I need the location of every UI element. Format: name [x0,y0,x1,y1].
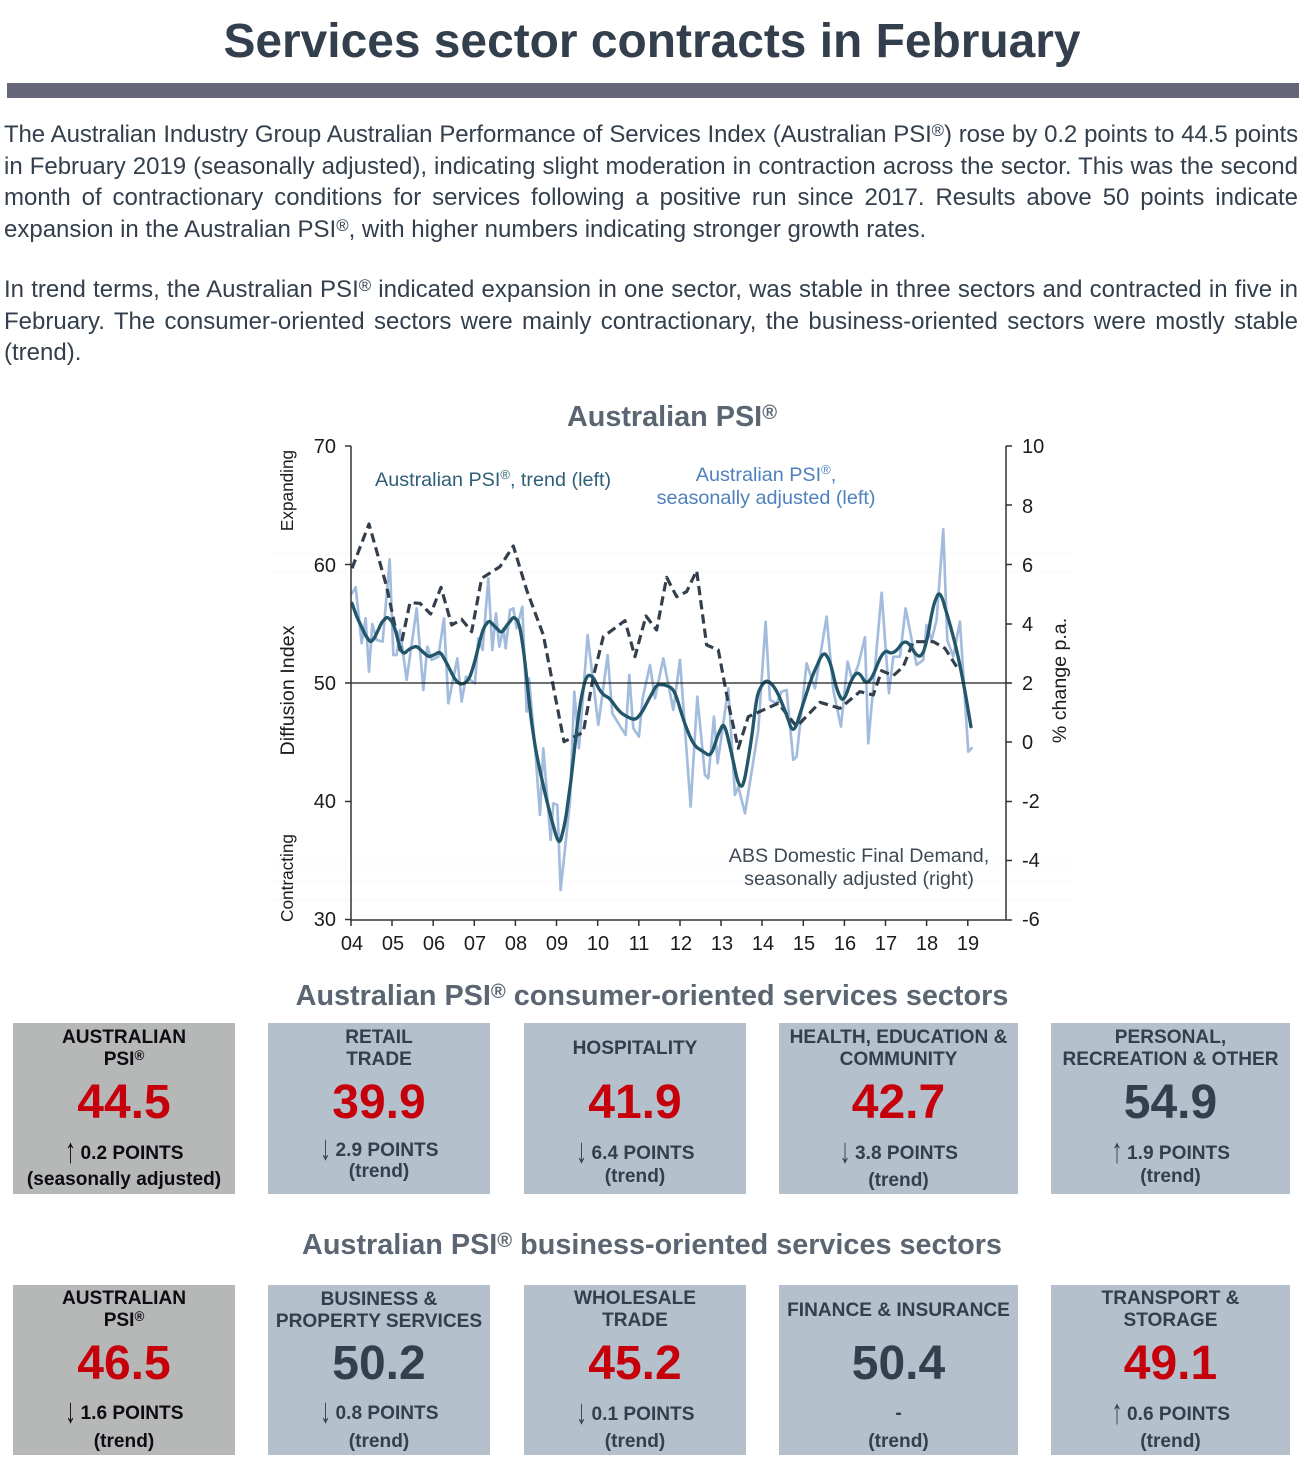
intro paragraph 2: (trend). [4,339,81,366]
card: personal, recreation and other: RECREATION & OTHER [1062,1049,1279,1070]
year labels: 15 [793,933,815,955]
left axis titles: Diffusion Index [277,625,299,755]
intro paragraph 1: expansion in the Australian PSI®, with higher numbers indicating stronger growth rates. [4,216,926,243]
intro paragraph 1: in February 2019 (seasonally adjusted), indicating slight moderation in contraction across the sector. This was the second [4,153,1298,180]
right axis labels [1022,436,1044,931]
series: PSI trend (dark teal) [352,594,971,842]
series label: trend: , trend (left) [510,469,611,491]
card: retail trade: TRADE [346,1049,412,1070]
axes and ticks [345,446,1012,926]
card: Australian PSI consumer: (seasonally adjusted) [27,1169,221,1190]
card: hospitality [524,1023,746,1194]
series label: ABS demand: ABS Domestic Final Demand, [729,845,989,867]
card: health, education and community: 3.8 POINTS [855,1143,958,1164]
card: wholesale trade: (trend) [605,1431,665,1452]
intro paragraph 2 [4,276,1298,366]
card: business and property services: (trend) [349,1431,409,1452]
card: hospitality: ↓ [576,1131,587,1171]
card: Australian PSI consumer: PSI® [104,1048,144,1070]
card: health, education and community: COMMUNITY [840,1049,957,1070]
series label: ABS demand: seasonally adjusted (right) [744,868,974,890]
card: hospitality: 41.9 [588,1076,682,1129]
year labels: 13 [711,933,733,955]
card: Australian PSI business [13,1285,235,1455]
card: finance and insurance: FINANCE & INSURANCE [787,1300,1010,1321]
card: business and property services: 0.8 POINTS [336,1403,438,1424]
card: transport and storage: 0.6 POINTS [1127,1404,1230,1425]
series label: seasonally adjusted: seasonally adjusted (left) [657,487,875,509]
card: hospitality: HOSPITALITY [573,1038,697,1059]
left axis labels: 30 [314,909,336,931]
left axis labels: 60 [314,555,336,577]
card: finance and insurance: - [895,1403,902,1424]
year labels: 11 [629,933,649,955]
card: Australian PSI consumer: 0.2 POINTS [81,1143,183,1164]
year labels: 10 [587,933,609,955]
intro paragraph 1 [4,121,1298,243]
card: personal, recreation and other: ↑ [1112,1131,1123,1171]
year labels: 04 [341,933,363,955]
card: wholesale trade: WHOLESALE [574,1288,696,1309]
title rule bar [7,83,1299,98]
card: Australian PSI business: AUSTRALIAN [62,1288,186,1309]
card: transport and storage: TRANSPORT & [1102,1288,1239,1309]
horizontal line at 50 [351,682,1011,684]
title: Services sector contracts in February [223,15,1081,68]
chart heading: Australian PSI® [567,401,777,433]
card: personal, recreation and other: (trend) [1140,1166,1201,1187]
card: health, education and community [779,1023,1018,1194]
year labels [341,933,979,955]
year labels: 18 [916,933,938,955]
card: business and property services: PROPERTY SERVICES [276,1311,482,1332]
left axis labels: 50 [314,673,336,695]
card: Australian PSI business: ↓ [65,1391,76,1431]
card: personal, recreation and other: PERSONAL, [1115,1027,1226,1048]
card: wholesale trade [524,1285,746,1455]
intro paragraph 2: In trend terms, the Australian PSI® indicated expansion in one sector, was stable in three sectors and contracted in five in [4,276,1298,303]
year labels: 05 [382,933,404,955]
right axis labels: 6 [1022,555,1033,577]
right axis labels: -4 [1022,850,1040,872]
year labels: 09 [546,933,568,955]
series label: seasonally adjusted: , [831,464,836,486]
left axis titles: Expanding [277,450,297,531]
card: Australian PSI consumer: AUSTRALIAN [62,1027,186,1048]
series: ABS Domestic Final Demand (dashed) [352,524,957,748]
left axis labels: 40 [314,791,336,813]
intro paragraph 1: The Australian Industry Group Australian Performance of Services Index (Australian PSI®) rose by 0.2 points to 44.5 points [4,121,1298,148]
line chart: Australian PSI [273,436,1071,955]
card: hospitality: (trend) [605,1166,665,1187]
series label: trend: ® [500,467,510,482]
series: seasonally adjusted PSI (light blue) [352,529,972,890]
year labels: 06 [423,933,445,955]
card: retail trade: 39.9 [332,1076,426,1129]
card: finance and insurance: (trend) [868,1431,929,1452]
card: retail trade: 2.9 POINTS [336,1140,438,1161]
card: Australian PSI consumer: ↑ [65,1131,76,1171]
card: wholesale trade: 45.2 [588,1337,682,1390]
card: retail trade [268,1023,490,1194]
right axis labels: 4 [1022,614,1033,636]
year labels: 12 [670,933,692,955]
card: health, education and community: 42.7 [852,1076,945,1129]
card: health, education and community: (trend) [868,1170,929,1191]
card: personal, recreation and other: 54.9 [1124,1076,1217,1129]
right axis labels: 0 [1022,732,1033,754]
card: Australian PSI consumer [13,1023,235,1194]
card: transport and storage: ↑ [1112,1392,1123,1432]
right axis labels: 8 [1022,496,1033,518]
card: finance and insurance [779,1285,1018,1455]
card: wholesale trade: TRADE [602,1310,668,1331]
card: Australian PSI business: PSI® [104,1309,144,1331]
left axis titles: Contracting [277,834,297,922]
card: wholesale trade: ↓ [576,1392,587,1432]
card: retail trade: (trend) [349,1161,409,1182]
right axis title: % change p.a. [1049,618,1071,743]
year labels: 19 [957,933,979,955]
card: personal, recreation and other [1051,1023,1290,1194]
card: transport and storage: 49.1 [1124,1337,1217,1390]
heading: consumer-oriented: Australian PSI® consumer-oriented services sectors [296,980,1008,1012]
left axis labels [314,436,336,931]
card: business and property services [268,1285,490,1455]
right axis labels: 10 [1022,436,1044,458]
year labels: 08 [505,933,527,955]
card: Australian PSI business: (trend) [94,1431,154,1452]
right axis labels: -6 [1022,909,1040,931]
card: health, education and community: ↓ [840,1131,851,1171]
intro paragraph 1: month of contractionary conditions for services following a positive run since 2017. Results above 50 points indicate [4,184,1298,211]
card: business and property services: 50.2 [332,1337,426,1390]
series label: seasonally adjusted: Australian PSI [696,462,836,486]
left axis titles [277,450,299,922]
card: retail trade: ↓ [320,1128,331,1168]
card: retail trade: RETAIL [345,1027,413,1048]
card: transport and storage: (trend) [1140,1431,1201,1452]
year labels: 16 [834,933,856,955]
card: wholesale trade: 0.1 POINTS [592,1404,694,1425]
card: health, education and community: HEALTH, EDUCATION & [790,1027,1007,1048]
right axis labels: -2 [1022,791,1040,813]
series label: seasonally adjusted: ® [821,462,831,477]
card: Australian PSI business: 46.5 [77,1337,171,1390]
right axis labels: 2 [1022,673,1033,695]
card: personal, recreation and other: 1.9 POINTS [1127,1143,1230,1164]
card: transport and storage [1051,1285,1290,1455]
card: transport and storage: STORAGE [1123,1310,1218,1331]
year labels: 17 [875,933,897,955]
card: Australian PSI business: 1.6 POINTS [81,1403,183,1424]
year labels: 07 [464,933,486,955]
series label: trend: Australian PSI [375,469,500,491]
card: Australian PSI consumer: 44.5 [77,1076,171,1129]
year labels: 14 [752,933,774,955]
heading: business-oriented: Australian PSI® business-oriented services sectors [302,1229,1002,1261]
left axis labels: 70 [314,436,336,458]
card: hospitality: 6.4 POINTS [592,1143,694,1164]
card: business and property services: BUSINESS & [321,1289,437,1310]
card: finance and insurance: 50.4 [852,1337,945,1390]
intro paragraph 2: February. The consumer-oriented sectors were mainly contractionary, the business-oriented sectors were mostly stable [4,308,1298,335]
card: business and property services: ↓ [320,1391,331,1431]
